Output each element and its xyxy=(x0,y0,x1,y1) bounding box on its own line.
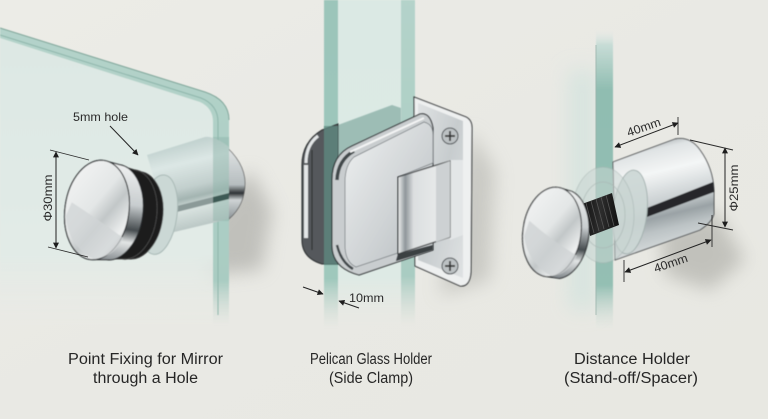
heading: distance holder label: Distance Holder xyxy=(574,351,690,368)
heading: pelican label: Pelican Glass Holder xyxy=(310,351,432,368)
panel: pelican glass holder xyxy=(302,0,495,387)
dimension: diameter 25mm xyxy=(690,140,741,230)
icon: mirror fixing hardware xyxy=(58,137,245,271)
glass pane xyxy=(568,30,613,330)
icon: round cap xyxy=(517,183,595,282)
dimension: 10mm thickness xyxy=(303,287,384,308)
heading: distance holder label: (Stand-off/Spacer) xyxy=(564,370,698,387)
wall shadow xyxy=(205,170,272,275)
dimension: top 40mm xyxy=(615,115,678,147)
wall shadow xyxy=(440,130,495,295)
glass pane xyxy=(324,0,415,328)
icon: hinge flap xyxy=(396,161,450,261)
dimension: bottom 40mm xyxy=(624,215,712,282)
dimension: diameter 30mm xyxy=(41,150,89,257)
callout: 5mm hole xyxy=(73,110,138,155)
heading: pelican label: (Side Clamp) xyxy=(329,370,413,387)
heading: point fixing label: Point Fixing for Mirror xyxy=(68,351,223,368)
icon: threaded rod xyxy=(582,193,619,236)
icon: mounting plate xyxy=(414,97,472,286)
dimension: bottom 40mm: 40mm xyxy=(652,251,690,276)
icon: cylinder spacer xyxy=(572,138,714,263)
dimension: top 40mm: 40mm xyxy=(625,115,663,140)
dimension: diameter 25mm: Φ25mm xyxy=(727,164,741,212)
dimension: diameter 30mm: Φ30mm xyxy=(41,174,55,222)
heading: point fixing label: through a Hole xyxy=(93,370,198,387)
panel: distance holder xyxy=(517,30,745,387)
wall shadow xyxy=(660,210,745,290)
callout: 5mm hole: 5mm hole xyxy=(73,110,128,124)
glass pane xyxy=(0,28,229,325)
dimension: 10mm thickness: 10mm xyxy=(349,291,384,305)
panel: point fixing for mirror xyxy=(0,28,272,387)
icon: rear clamp xyxy=(302,105,401,265)
icon: front clamp xyxy=(332,114,433,275)
